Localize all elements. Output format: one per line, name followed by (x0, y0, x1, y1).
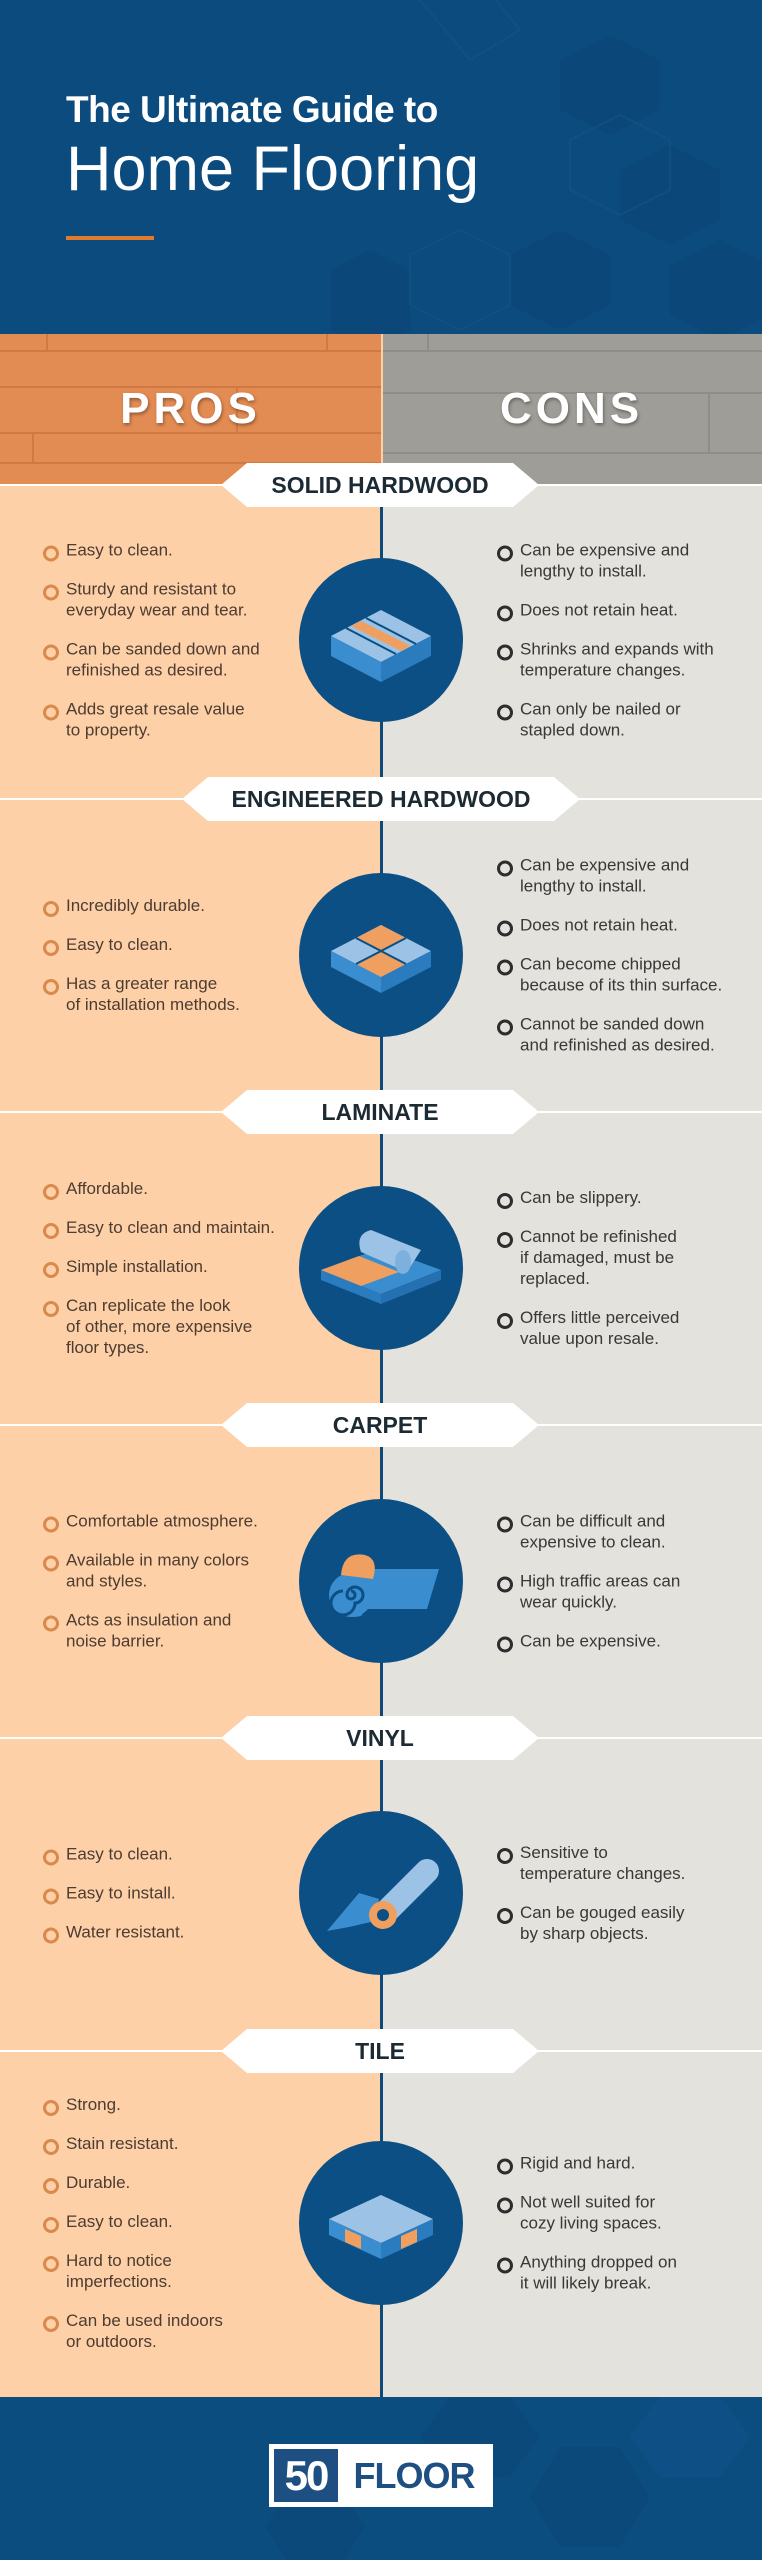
label: tile (221, 2029, 539, 2073)
cons: laminate: Can be slippery. (520, 1188, 642, 1207)
pros: laminate: Simple installation. (66, 1257, 208, 1276)
cons: tile: cozy living spaces. (520, 2214, 662, 2232)
pros background (0, 484, 381, 2397)
pros: solid hardwood: Easy to clean. (66, 540, 173, 560)
cons: tile: Rigid and hard. (520, 2154, 635, 2172)
pros: solid hardwood (43, 540, 260, 740)
icon: vinyl (299, 1811, 463, 1975)
cons: vinyl: by sharp objects. (520, 1924, 649, 1943)
label: tile: TILE (355, 2038, 405, 2064)
icon: solid hardwood (299, 558, 463, 722)
icon: engineered (299, 873, 463, 1037)
cons: tile (497, 2154, 677, 2292)
icon: laminate (299, 1186, 463, 1350)
pros: tile (43, 2095, 223, 2351)
cons: solid hardwood: Can be expensive and (520, 540, 689, 560)
pros: tile: imperfections. (66, 2272, 172, 2291)
center vertical line (380, 484, 383, 2397)
cons: laminate (497, 1188, 679, 1348)
title: The Ultimate Guide to (66, 89, 438, 130)
pros: vinyl: Easy to install. (66, 1884, 176, 1902)
cons: engineered (497, 856, 722, 1054)
cons: engineered: Can be expensive and (520, 856, 689, 874)
pros: laminate: Can replicate the look (66, 1296, 230, 1315)
pros: tile: Stain resistant. (66, 2134, 178, 2153)
pros: tile: Durable. (66, 2173, 130, 2192)
cons: tile: Not well suited for (520, 2192, 655, 2212)
title: Home Flooring (66, 134, 479, 204)
cons: tile: it will likely break. (520, 2274, 651, 2292)
label: laminate (221, 1090, 539, 1134)
pros: engineered (43, 896, 240, 1014)
cons: laminate: value upon resale. (520, 1329, 659, 1348)
cons: engineered: Can become chipped (520, 954, 681, 974)
logo: 50 FLOOR (269, 2444, 493, 2507)
label: solid hardwood: SOLID HARDWOOD (271, 472, 489, 498)
cons: carpet: High traffic areas can (520, 1572, 680, 1590)
header background (0, 0, 762, 334)
cons: laminate: Offers little perceived (520, 1308, 679, 1327)
label: carpet: CARPET (333, 1412, 427, 1438)
pros: solid hardwood: to property. (66, 720, 151, 740)
cons: solid hardwood (497, 540, 714, 740)
pros: tile: Hard to notice (66, 2251, 172, 2270)
cons: solid hardwood: Does not retain heat. (520, 600, 678, 620)
pros: laminate: floor types. (66, 1338, 149, 1357)
cons: engineered: lengthy to install. (520, 876, 647, 896)
cons: solid hardwood: lengthy to install. (520, 562, 647, 580)
label: vinyl (221, 1716, 539, 1760)
cons: laminate: Cannot be refinished (520, 1227, 677, 1246)
cons: carpet: wear quickly. (520, 1592, 617, 1612)
pros: tile: Easy to clean. (66, 2212, 173, 2231)
cons: engineered: and refinished as desired. (520, 1036, 715, 1054)
pros: laminate: Affordable. (66, 1179, 148, 1198)
pros: laminate: Easy to clean and maintain. (66, 1218, 275, 1237)
CONS heading: CONS (500, 384, 643, 433)
cons: carpet: Can be difficult and (520, 1512, 665, 1530)
pros: carpet: noise barrier. (66, 1632, 164, 1650)
pros: solid hardwood: refinished as desired. (66, 660, 228, 680)
pros: engineered: of installation methods. (66, 995, 240, 1014)
cons banner (383, 334, 762, 484)
pros: carpet: Available in many colors (66, 1550, 249, 1570)
logo: 50 FLOOR: FLOOR (354, 2455, 474, 2496)
cons: engineered: Cannot be sanded down (520, 1014, 704, 1034)
title underline (66, 236, 154, 240)
title (66, 89, 479, 204)
icon: tile (299, 2141, 463, 2305)
pros: engineered: Easy to clean. (66, 935, 173, 954)
PROS heading: PROS (120, 384, 261, 433)
cons: solid hardwood: temperature changes. (520, 660, 685, 680)
label: carpet (221, 1403, 539, 1447)
cons background (381, 484, 762, 2397)
label: engineered hardwood: ENGINEERED HARDWOOD (231, 786, 530, 812)
pros: carpet: and styles. (66, 1572, 147, 1590)
cons: engineered: Does not retain heat. (520, 916, 678, 934)
pros: carpet (43, 1512, 258, 1650)
pros: tile: Strong. (66, 2095, 121, 2114)
cons: vinyl (497, 1843, 685, 1943)
cons: laminate: if damaged, must be (520, 1248, 674, 1267)
pros: carpet: Acts as insulation and (66, 1610, 231, 1630)
pros: vinyl: Water resistant. (66, 1922, 184, 1942)
pros: engineered: Has a greater range (66, 974, 217, 993)
pros: carpet: Comfortable atmosphere. (66, 1512, 258, 1530)
logo: 50 FLOOR: 50 (285, 2452, 327, 2499)
cons: vinyl: Can be gouged easily (520, 1903, 684, 1922)
pros: solid hardwood: Can be sanded down and (66, 640, 260, 658)
label: laminate: LAMINATE (321, 1099, 439, 1125)
pros: vinyl: Easy to clean. (66, 1844, 173, 1864)
cons: solid hardwood: Shrinks and expands with (520, 640, 714, 658)
pros: tile: or outdoors. (66, 2332, 157, 2351)
pros: laminate (43, 1179, 275, 1357)
cons: laminate: replaced. (520, 1269, 590, 1288)
pros: laminate: of other, more expensive (66, 1317, 252, 1336)
icon: carpet (299, 1499, 463, 1663)
pros: vinyl (43, 1844, 184, 1944)
pros banner (0, 334, 381, 484)
cons: solid hardwood: Can only be nailed or (520, 700, 681, 718)
cons: solid hardwood: stapled down. (520, 720, 625, 740)
cons: carpet (497, 1512, 680, 1652)
pros: solid hardwood: Sturdy and resistant to (66, 580, 236, 598)
cons: vinyl: Sensitive to (520, 1843, 608, 1862)
label: vinyl: VINYL (346, 1725, 414, 1751)
cons: carpet: Can be expensive. (520, 1632, 661, 1650)
pros: solid hardwood: everyday wear and tear. (66, 600, 247, 620)
label: engineered hardwood (182, 777, 580, 821)
cons: vinyl: temperature changes. (520, 1864, 685, 1883)
cons: carpet: expensive to clean. (520, 1532, 666, 1552)
footer (0, 2397, 762, 2560)
cons: engineered: because of its thin surface. (520, 976, 722, 994)
label: solid hardwood (221, 463, 539, 507)
cons: tile: Anything dropped on (520, 2252, 677, 2272)
pros: tile: Can be used indoors (66, 2311, 223, 2330)
pros: solid hardwood: Adds great resale value (66, 700, 245, 718)
pros: engineered: Incredibly durable. (66, 896, 205, 915)
